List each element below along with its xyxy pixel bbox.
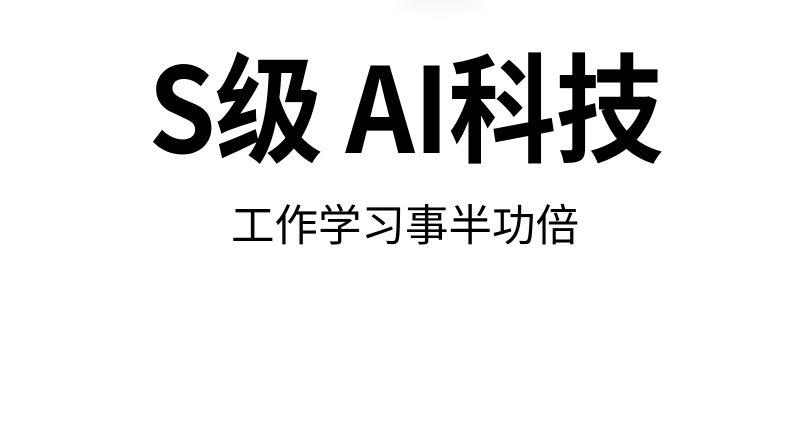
title: S级 AI科技 bbox=[148, 16, 663, 187]
subtitle: 工作学习事半功倍 bbox=[231, 191, 579, 254]
